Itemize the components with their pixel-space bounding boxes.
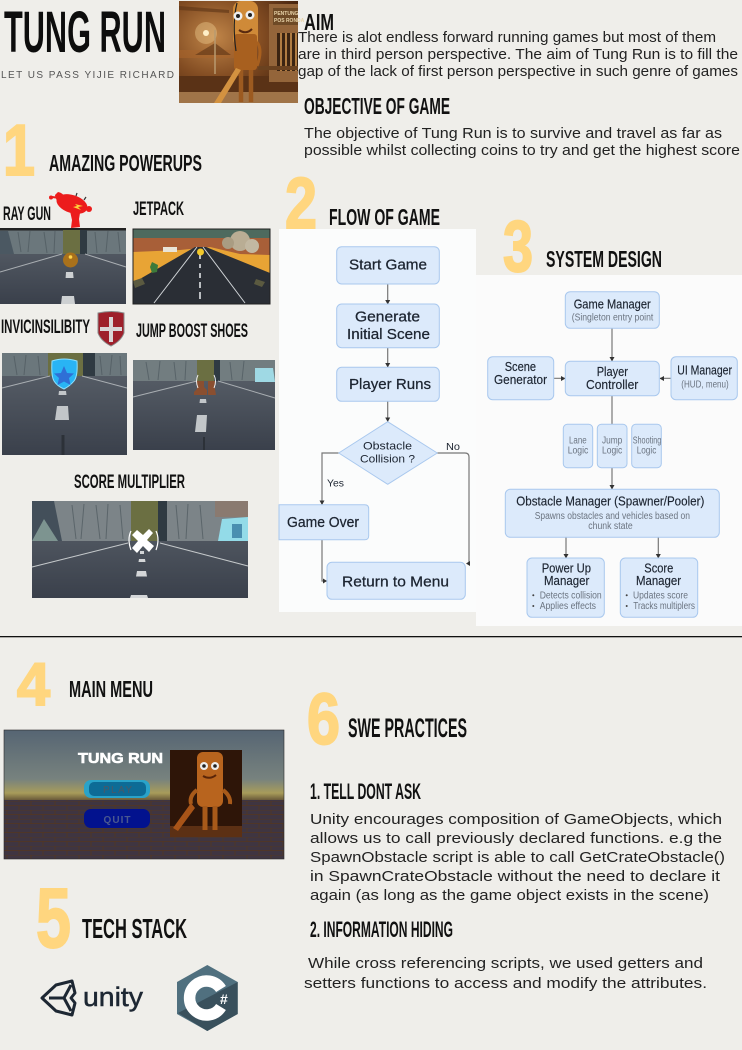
powerup label: score multiplier: SCORE MULTIPLIER [74, 472, 185, 493]
node: start game: Start Game [349, 258, 427, 274]
logo: unity [42, 981, 144, 1015]
text block: tell dont ask: SpawnObstacle script is able to call GetCrateObstacle() [310, 849, 725, 866]
screenshot: invincibility [2, 353, 127, 455]
text block: tell dont ask: again (as long as the game object exists in the scene) [310, 887, 709, 904]
node: generate initial scene [337, 304, 439, 348]
powerup label: jump boost shoes: JUMP BOOST SHOES [136, 321, 248, 342]
node: player runs [337, 367, 439, 401]
node: score manager: Updates score [633, 590, 688, 601]
image: game character at night: PENTUNG [274, 11, 299, 17]
text block: objective [304, 125, 740, 159]
text block: objective: The objective of Tung Run is to survive and travel as far as [304, 125, 722, 142]
text block: aim: gap of the lack of first person perspective in such genre of games [298, 63, 738, 80]
screenshot: main menu [4, 730, 284, 859]
node: game manager: Game Manager [574, 297, 651, 311]
powerup label: invincibility: INVICINSILIBITY [1, 317, 90, 338]
icon: shield [98, 312, 124, 346]
section 4 number: 4 [17, 651, 51, 718]
section: objective of game [304, 93, 740, 159]
node: scene generator: Scene [505, 360, 536, 374]
text block: information hiding: setters functions to access and modify the attributes. [304, 975, 707, 992]
text block: information hiding [304, 955, 707, 992]
logo: c sharp: # [220, 991, 228, 1007]
logo: unity: unity [83, 982, 144, 1012]
node: lane logic: Lane [569, 435, 587, 446]
title: TUNG RUN [4, 0, 166, 65]
text block: tell dont ask [310, 811, 725, 904]
node: obstacle manager: chunk state [588, 521, 633, 532]
section 3 number: 3 [503, 207, 533, 287]
screenshot: jetpack [133, 229, 270, 304]
node: generate initial scene: Initial Scene [347, 327, 430, 343]
panel: flow chart [279, 229, 476, 612]
node: player controller: Controller [586, 378, 638, 392]
heading: flow of game: FLOW OF GAME [329, 204, 440, 230]
menu title: TUNG RUN [78, 750, 163, 767]
node: game manager: (Singleton entry point [572, 312, 653, 323]
node: jump logic [597, 424, 627, 468]
node: game manager [565, 292, 659, 328]
character portrait [170, 750, 242, 837]
quit button: QUIT [104, 815, 130, 826]
screenshot: score multiplier [32, 501, 248, 598]
node: scene generator [488, 357, 554, 400]
screenshot: ray gun [0, 228, 126, 304]
node: score manager: Manager [636, 574, 681, 588]
node: power up manager: Power Up [542, 561, 591, 575]
node: jump logic: Logic [602, 446, 622, 457]
arrows: flow connectors [320, 284, 470, 584]
node: game over [279, 505, 369, 540]
subheading: information hiding: 2. INFORMATION HIDING [310, 917, 453, 942]
node: power up manager [527, 558, 604, 617]
text block: aim: There is alot endless forward running games but most of them [298, 29, 716, 46]
node: lane logic: Logic [568, 446, 588, 457]
text block: objective: possible whilst collecting coins to try and get the highest score [304, 142, 740, 159]
heading: amazing powerups: AMAZING POWERUPS [49, 150, 202, 176]
node: ui manager [671, 357, 737, 400]
heading: tech stack: TECH STACK [82, 913, 187, 944]
subtitle: LET US PASS YIJIE RICHARD [1, 70, 174, 81]
section 2 number: 2 [285, 164, 317, 244]
node: ui manager: (HUD, menu) [681, 380, 729, 391]
text block: aim: are in third person perspective. The aim of Tung Run is to fill the [298, 46, 738, 63]
section: aim [298, 9, 738, 80]
section 6 number: 6 [307, 680, 340, 760]
screenshot: jump boost shoes [133, 360, 275, 450]
text block: information hiding: While cross referencing scripts, we used getters and [308, 955, 703, 972]
node: power up manager: Detects collision [540, 590, 602, 601]
panel: system design diagram [476, 275, 742, 626]
image: game character at night: POS RONDA [274, 18, 305, 24]
node: return to menu [327, 562, 465, 599]
heading: system design: SYSTEM DESIGN [546, 246, 662, 272]
label: no: No [446, 441, 460, 453]
icon: ray gun [49, 190, 92, 228]
heading: aim: AIM [304, 9, 334, 35]
node: score manager [620, 558, 698, 617]
node: power up manager: Manager [544, 574, 589, 588]
node: start game [337, 247, 439, 284]
node: jump logic: Jump [602, 435, 623, 446]
text block: tell dont ask: allows us to call previously declared functions. e.g the [310, 830, 722, 847]
node: scene generator: Generator [494, 373, 547, 387]
label: yes: Yes [327, 478, 344, 490]
node: score manager: Tracks multiplers [633, 601, 695, 612]
node: generate initial scene: Generate [355, 310, 420, 326]
play button [84, 780, 150, 798]
section 5 number: 5 [36, 871, 71, 965]
node: return to menu: Return to Menu [342, 575, 449, 591]
heading: objective: OBJECTIVE OF GAME [304, 93, 450, 119]
play button: PLAY [103, 785, 132, 796]
node: ui manager: UI Manager [677, 363, 732, 377]
heading: swe practices: SWE PRACTICES [348, 713, 467, 743]
image: game character at night [179, 1, 305, 103]
text block: aim [298, 29, 738, 80]
node: game over: Game Over [287, 515, 359, 531]
subheading: tell dont ask: 1. TELL DONT ASK [310, 779, 421, 804]
heading: main menu: MAIN MENU [69, 676, 153, 702]
node: player controller [565, 361, 659, 396]
text block: tell dont ask: Unity encourages composition of GameObjects, which [310, 811, 722, 828]
node: obstacle manager: Obstacle Manager (Spawner/Pooler) [516, 495, 704, 509]
node: player controller: Player [597, 365, 628, 379]
powerup label: ray gun: RAY GUN [3, 204, 51, 225]
node: obstacle manager [505, 489, 719, 537]
node: obstacle collision decision: Obstacle [363, 440, 412, 452]
section 1 number: 1 [3, 111, 35, 191]
text block: tell dont ask: in SpawnCrateObstacle without the need to declare it [310, 868, 721, 885]
node: player runs: Player Runs [349, 377, 431, 393]
logo: c sharp [177, 965, 238, 1031]
node: obstacle manager: Spawns obstacles and vehicles based on [535, 511, 690, 522]
powerup label: jetpack: JETPACK [133, 199, 184, 220]
node: shooting logic: Logic [637, 446, 656, 457]
node: power up manager: Applies effects [540, 601, 596, 612]
node: score manager: Score [644, 561, 673, 575]
node: shooting logic: Shooting [633, 435, 661, 446]
quit button [84, 809, 150, 828]
node: obstacle collision decision: Collision ? [360, 453, 415, 465]
node: obstacle collision decision [339, 422, 437, 484]
node: lane logic [563, 424, 593, 468]
node: shooting logic [632, 424, 661, 468]
arrows: system connectors [554, 328, 671, 558]
